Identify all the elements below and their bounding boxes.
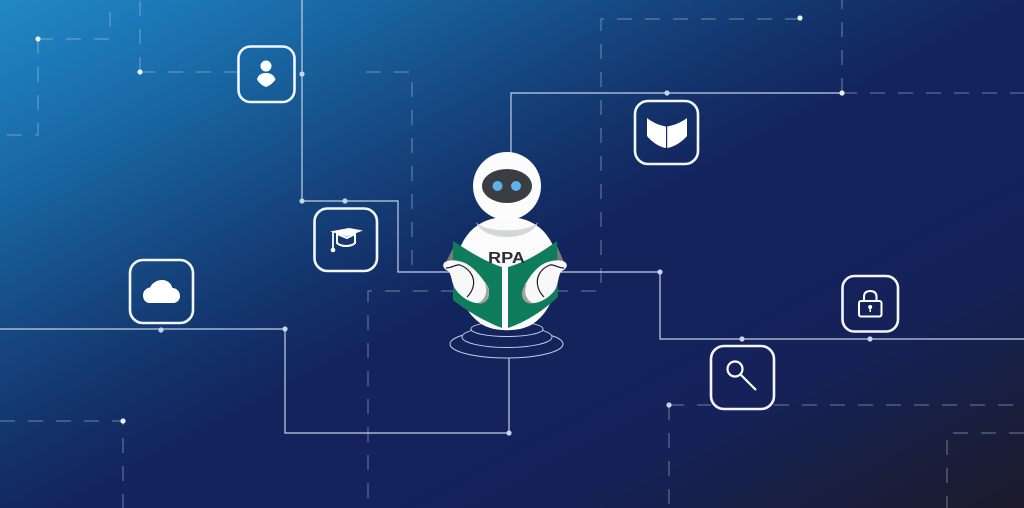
right book page <box>508 241 558 328</box>
robot reading a book <box>443 152 567 330</box>
robot collar shadow <box>476 222 538 237</box>
platform rings <box>450 322 563 358</box>
left arm <box>443 260 489 303</box>
RPA label: RPA <box>488 250 525 267</box>
left hand shadow <box>478 284 489 304</box>
right arm <box>522 260 567 303</box>
icon: padlock <box>842 276 898 332</box>
icon: person <box>238 46 294 102</box>
robot right eye <box>511 181 521 191</box>
robot left eye <box>492 181 502 191</box>
right hand shadow <box>522 284 533 304</box>
robot face visor <box>482 169 532 203</box>
robot head <box>473 152 541 220</box>
connection dots <box>35 15 873 436</box>
left book page <box>453 241 502 328</box>
robot body <box>456 217 558 330</box>
left arm outline <box>446 265 474 297</box>
icon: open book <box>635 101 698 164</box>
icon: graduation cap <box>314 208 377 271</box>
icon: cloud <box>130 260 193 323</box>
right arm outline <box>537 265 564 297</box>
robot shoulder shadows <box>446 246 564 262</box>
icon: magnifying glass <box>711 346 774 409</box>
